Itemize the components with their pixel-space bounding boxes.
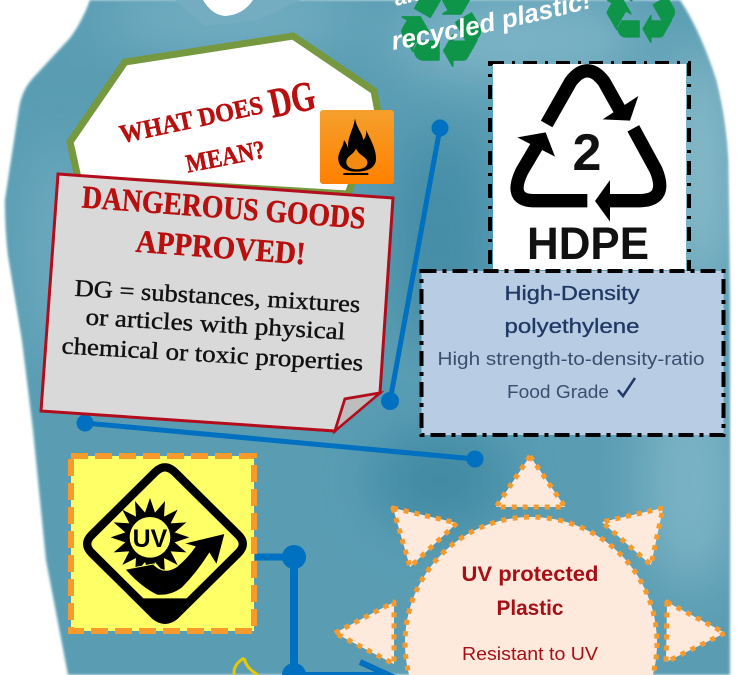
icon: flammable — [320, 110, 394, 184]
text: definition: DG = substances, mixtures — [74, 276, 361, 318]
text: properties: High strength-to-density-ratio — [438, 349, 704, 369]
panel: UV protected sun — [335, 456, 725, 675]
text: definition — [61, 276, 364, 377]
text: definition: chemical or toxic properties — [61, 333, 364, 377]
panel: high density polyethylene — [422, 271, 724, 435]
heading: dangerous goods: DANGEROUS GOODS — [81, 178, 367, 236]
heading: dangerous goods — [81, 178, 367, 271]
text: definition: or articles with physical — [85, 305, 346, 345]
panel: what does DG mean — [70, 36, 378, 194]
heading: UV protected plastic: UV protected — [462, 563, 598, 586]
sun body — [405, 517, 657, 675]
heading: what does DG mean: DG — [265, 73, 320, 128]
sun rays — [335, 456, 725, 664]
heading: high-density polyethylene: polyethylene — [504, 316, 640, 338]
heading: UV protected plastic: Plastic — [496, 597, 564, 620]
HDPE label: HDPE — [527, 218, 649, 269]
heading: what does DG mean: MEAN? — [183, 135, 267, 179]
icon: recycling triangle — [517, 71, 660, 222]
heading: high-density polyethylene: High-Density — [504, 283, 640, 305]
icon: check mark — [618, 378, 635, 396]
icon: yellow banana shape — [234, 658, 258, 675]
heading: high-density polyethylene — [504, 283, 640, 338]
number 2: 2 — [573, 124, 601, 182]
heading: what does DG mean — [117, 73, 320, 179]
heading: dangerous goods: APPROVED! — [135, 223, 307, 271]
panel: dangerous goods approved — [41, 174, 393, 431]
connector: UV to sun — [255, 545, 395, 675]
icon: UV warning diamond: UV — [133, 525, 167, 553]
heading: UV protected plastic — [462, 563, 598, 620]
text: properties: Food Grade — [507, 382, 609, 402]
connector lines — [76, 120, 484, 468]
heading: what does DG mean: WHAT DOES — [117, 90, 266, 149]
panel: UV icon — [71, 456, 254, 631]
text: resistant to UV — [462, 644, 598, 675]
icon: recycling symbols — [393, 0, 682, 92]
icon: UV warning diamond — [87, 467, 243, 620]
text: properties — [438, 349, 704, 402]
text: resistant to UV: Resistant to UV — [462, 644, 598, 664]
panel: HDPE code — [490, 63, 689, 278]
